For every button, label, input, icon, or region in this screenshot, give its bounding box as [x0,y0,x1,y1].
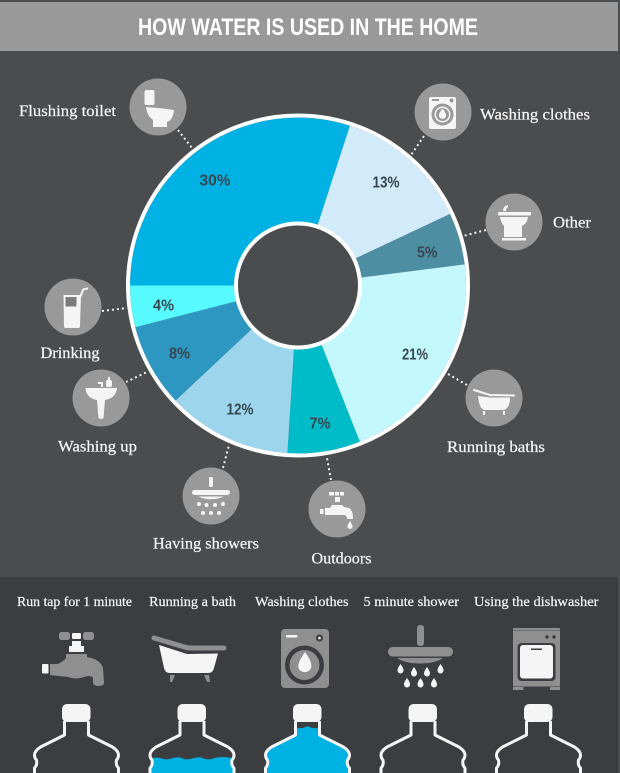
icon: toilet [130,78,186,136]
icon: tap [42,632,104,686]
column label: dishwasher: Using the dishwasher [474,595,599,610]
connector: other [463,230,486,236]
connector: toilet [178,130,192,148]
column label: running a bath: Running a bath [149,595,236,610]
panel: water use per activity [0,577,618,773]
slice: washing clothes 13% [316,126,450,260]
label: having showers: Having showers [153,536,259,552]
bottle: dishwasher, empty [496,704,580,773]
bottle: running a bath, low water [150,704,234,773]
title banner: HOW WATER IS USED IN THE HOME [138,14,478,41]
slice: having showers 12% [176,327,294,453]
icon: bathtub [154,638,224,682]
connector: drinking [102,308,127,311]
label: outdoors: Outdoors [312,550,372,568]
outer ring [128,116,468,456]
column label: run tap: Run tap for 1 minute [17,595,132,610]
value: 8%: 8% [169,346,190,362]
label: flushing toilet: Flushing toilet [19,103,117,120]
value: 5%: 5% [417,244,438,262]
connector: washing up [126,372,147,382]
icon: sink [72,370,130,426]
label: running baths: Running baths [447,439,545,456]
donut chart [128,116,468,456]
icon: outdoor tap [308,480,366,538]
bottle: washing clothes, nearly full [266,704,350,773]
icon: dishwasher [513,628,560,690]
slice: washing up 8% [135,300,254,400]
connector: showers [223,445,229,468]
label: washing up: Washing up [58,438,137,456]
value: 13%: 13% [372,174,400,192]
slice: drinking 4% [130,286,240,327]
icon: shower head [388,625,453,688]
value: 12%: 12% [226,402,254,418]
connector: outdoors [327,458,331,480]
icon: washing machine [281,629,329,688]
connector: baths [448,374,467,385]
label: drinking: Drinking [40,345,100,362]
label: washing clothes: Washing clothes [480,106,590,124]
column label: washing clothes: Washing clothes [255,595,348,610]
slice: other 5% [352,214,465,278]
value: 21%: 21% [402,346,428,364]
connector: washing clothes [411,136,424,155]
icon: drinking glass [44,278,102,336]
label: other: Other [553,214,592,232]
icon: washing machine [414,84,472,140]
donut hole [236,224,360,348]
icon: bath [466,370,522,426]
slice: outdoors 7% [287,341,360,454]
value: 4%: 4% [153,298,174,314]
bottle: run tap, empty [34,704,118,773]
value: 7%: 7% [310,416,331,432]
title banner [0,2,618,51]
column label: 5 minute shower: 5 minute shower [364,595,459,610]
icon: shower [182,468,240,524]
slice: running baths 21% [320,264,466,442]
icon: other (bidet) [486,194,542,250]
value: 30%: 30% [200,172,231,190]
bottle: 5 minute shower, empty [381,704,465,773]
slice: flushing toilet 30% [130,117,350,286]
